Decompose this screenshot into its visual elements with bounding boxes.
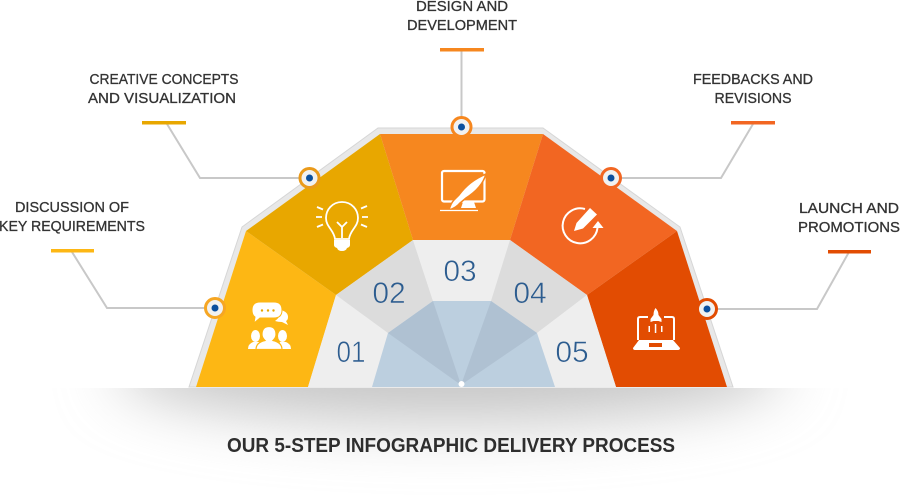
node 2 <box>300 168 319 188</box>
label: discussion of key requirements <box>0 200 145 235</box>
segment 1 yellow <box>196 231 336 387</box>
icon: monitor with pen <box>440 171 486 210</box>
label: feedbacks and revisions: FEEDBACKS AND <box>693 72 813 88</box>
label: launch and promotions: PROMOTIONS <box>798 220 900 236</box>
centre fan <box>372 301 555 387</box>
label: discussion of key requirements: DISCUSSION OF <box>15 200 129 216</box>
segment 2 gold <box>246 134 413 295</box>
bar and connector 3 <box>440 48 484 118</box>
number panel 03 <box>413 240 510 301</box>
number panel 04: 04 <box>513 277 547 310</box>
icon: people chatting <box>248 302 291 350</box>
number panel 03: 03 <box>443 255 477 288</box>
inner white base <box>196 134 727 387</box>
number panel 01: 01 <box>336 336 366 369</box>
label: design and development: DEVELOPMENT <box>407 18 517 34</box>
title: OUR 5-STEP INFOGRAPHIC DELIVERY PROCESS <box>227 435 675 457</box>
label: design and development <box>407 0 517 34</box>
node 5 <box>698 300 716 318</box>
number panel 02: 02 <box>372 277 406 310</box>
number panel 01 <box>308 295 388 387</box>
label: creative concepts: CREATIVE CONCEPTS <box>90 72 238 88</box>
label: creative concepts: AND VISUALIZATION <box>88 91 236 107</box>
semicircle frame <box>189 128 733 387</box>
node 1 <box>206 298 224 318</box>
number panel 04 <box>491 240 587 333</box>
bar and connector 4 <box>620 121 775 178</box>
label: launch and promotions <box>798 201 900 236</box>
label: creative concepts <box>88 72 238 107</box>
bar and connector 1 <box>51 249 205 308</box>
floor shadow <box>108 388 792 454</box>
icon: light bulb <box>316 202 368 251</box>
bar and connector 2 <box>142 121 300 178</box>
icon: pencil with revision arrow <box>563 208 604 243</box>
number panel 05: 05 <box>555 336 589 369</box>
label: launch and promotions: LAUNCH AND <box>799 201 899 217</box>
number panel 05 <box>537 295 616 387</box>
segment 5 red-orange <box>587 231 727 387</box>
segment 3 orange <box>380 134 543 240</box>
node 3 <box>452 118 471 136</box>
label: feedbacks and revisions <box>693 72 813 107</box>
node 4 <box>602 168 620 188</box>
bar and connector 5 <box>716 250 871 309</box>
number panel 02 <box>336 240 433 333</box>
label: discussion of key requirements: KEY REQUIREMENTS <box>0 219 145 235</box>
icon: laptop with rocket <box>633 308 680 350</box>
segment 4 deep orange <box>510 134 677 295</box>
label: feedbacks and revisions: REVISIONS <box>714 91 792 107</box>
